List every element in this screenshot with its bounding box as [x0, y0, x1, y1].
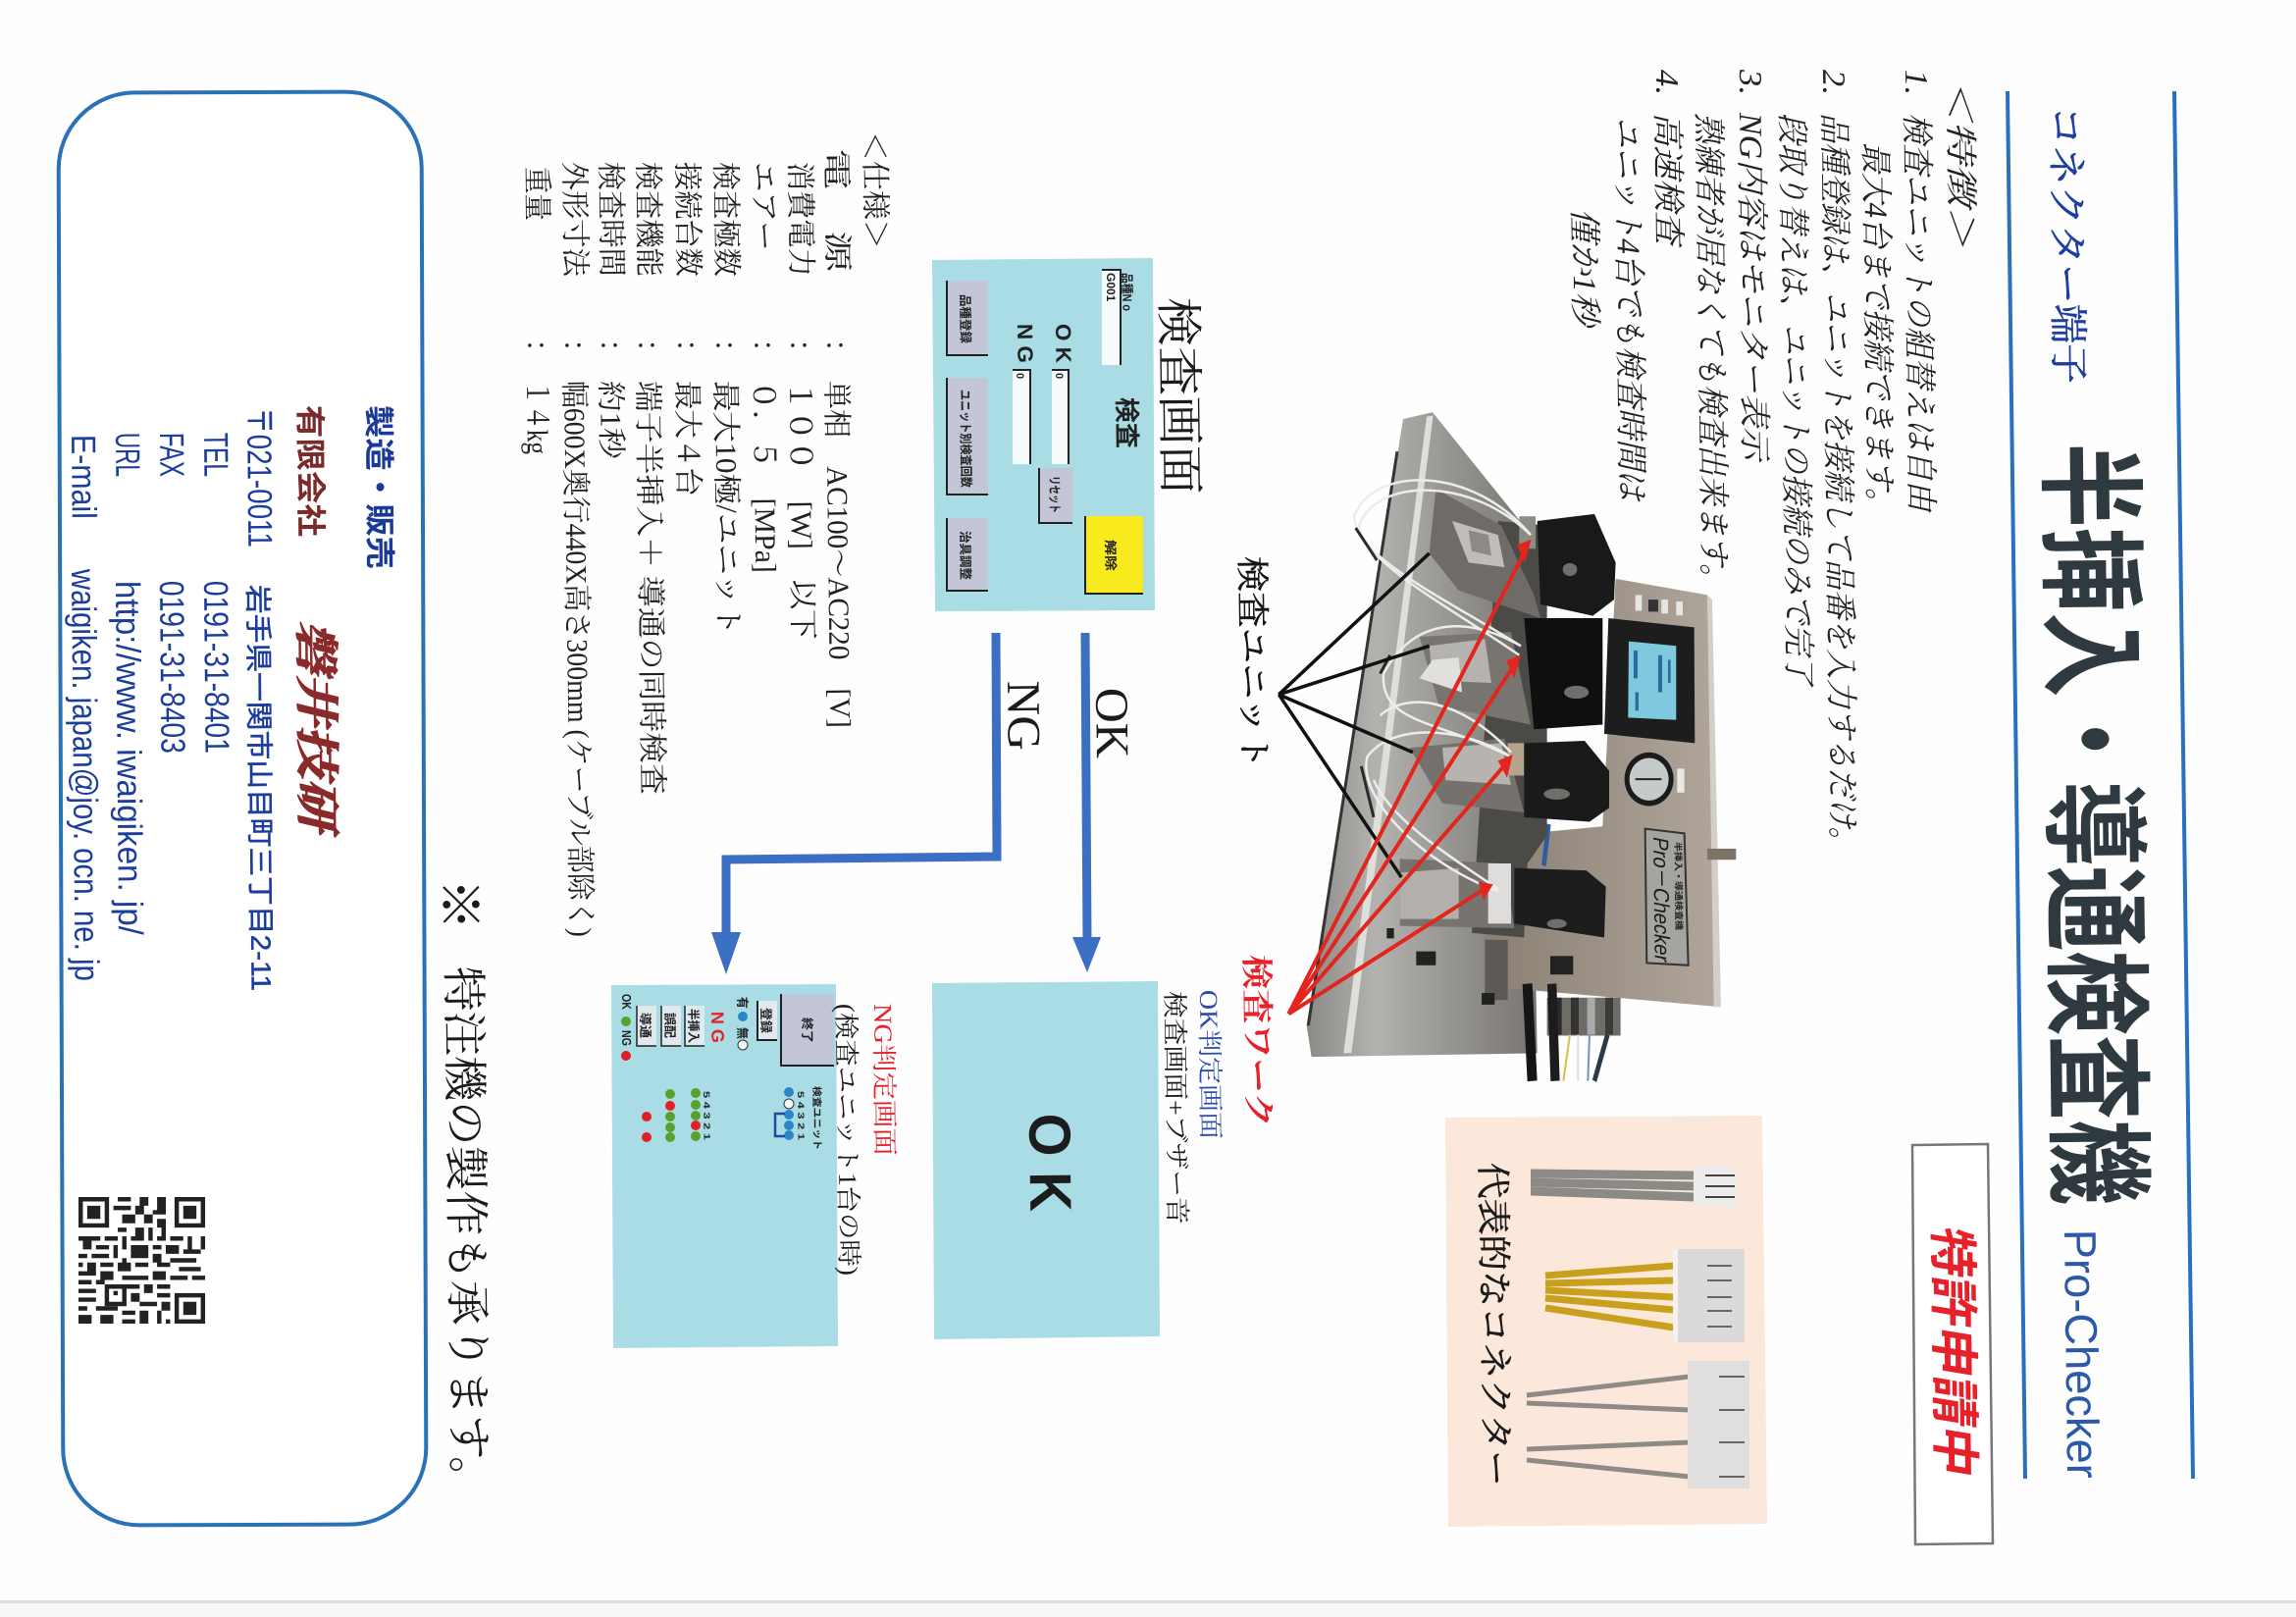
telephone: TEL — [196, 433, 235, 477]
screen title: 検査 — [1112, 397, 1142, 448]
spec: dimensions: 幅600X奥行440X高さ300mm (ケーブル部除く) — [557, 381, 597, 937]
panel: inspection screen — [932, 258, 1155, 611]
OK NG legend — [619, 994, 634, 1061]
OK counter: 0 — [1053, 373, 1065, 379]
email: waigiken. japan@joy. ocn. ne. jp — [64, 568, 106, 981]
label: inspection work: 検査ワーク — [1237, 955, 1276, 1127]
screen bezel — [1604, 618, 1695, 743]
feature 1 — [1856, 70, 1938, 518]
spec: functions: 端子半挿入＋ 導通の同時検査 — [631, 381, 668, 795]
connector: grey four-wire — [1527, 1361, 1749, 1488]
feature 4: 僅か1秒 — [1565, 208, 1602, 331]
connector: grey three-wire — [1531, 1166, 1737, 1207]
half insertion label: 半挿入 — [686, 1009, 701, 1043]
spec: functions: ： — [631, 339, 663, 368]
label: inspection unit: 検査ユニット — [1232, 556, 1273, 769]
features text block — [1565, 69, 1978, 857]
spec: weight — [520, 167, 553, 454]
QR code — [78, 1197, 205, 1324]
spec: connections: 最大４台 — [670, 381, 704, 496]
NG status: N G — [707, 1012, 727, 1043]
manufacturer label: 製造・販売 — [361, 405, 396, 569]
fax: FAX — [152, 433, 190, 477]
product number field — [1102, 270, 1121, 365]
hose — [1543, 824, 1548, 865]
feature 3: 熟練者が居なくても検査出来ます。 — [1690, 113, 1731, 594]
inspection unit map: 検査ユニット — [810, 1086, 824, 1150]
product number label: 品種N o — [1120, 273, 1134, 311]
base plate — [1307, 412, 1538, 1057]
feature 3: 3. — [1732, 69, 1767, 95]
product name: Pro-Checker — [2055, 1228, 2109, 1479]
product register button: 品種登録 — [958, 294, 973, 343]
feature 3: NG内容はモニター表示 — [1732, 112, 1771, 463]
inspection unit map: 5 4 3 2 1 — [796, 1091, 807, 1140]
spec heading: ＜仕様＞ — [858, 131, 891, 249]
presence legend: 有 — [735, 997, 750, 1009]
NG caption: NG判定画面 — [868, 1004, 899, 1156]
spec: dimensions — [557, 162, 597, 937]
url: http://www. iwaigiken. jp/ — [108, 581, 149, 935]
panel: OK result screen — [932, 981, 1160, 1339]
spec: connections — [670, 162, 704, 496]
wiring label — [661, 1006, 681, 1046]
reset button — [1039, 468, 1072, 523]
pressure gauge — [1625, 753, 1685, 807]
machine photo illustration — [1278, 412, 1736, 1081]
feature 4: 4. — [1648, 70, 1684, 95]
email: E-mail — [64, 435, 103, 519]
release button — [1085, 516, 1143, 594]
spec: air: ： — [747, 339, 779, 368]
panel: company contact — [58, 91, 427, 1526]
feature 2: 2. — [1815, 70, 1851, 95]
product register button — [947, 281, 988, 355]
spec: poles: 最大10極/ユニット — [708, 381, 744, 636]
reset button: リセット — [1047, 476, 1062, 513]
white wires — [1354, 480, 1531, 891]
NG caption — [831, 1004, 899, 1276]
feature 1: 検査ユニットの組替えは自由 — [1898, 113, 1938, 514]
company name: 磐井技研 — [290, 619, 341, 841]
end button: 終了 — [800, 1017, 814, 1043]
per-unit inspection count button: ユニット別検査回数 — [958, 390, 973, 488]
spec: functions: 検査機能 — [631, 162, 664, 277]
telephone — [196, 433, 236, 754]
OK NG legend: OK — [619, 994, 634, 1011]
arrow: NG — [711, 633, 997, 974]
side knob — [1707, 849, 1736, 860]
NG counter — [1013, 324, 1037, 464]
continuity label: 導通 — [638, 1013, 652, 1038]
black fixture blocks — [1538, 514, 1616, 616]
spec: power consumption — [783, 162, 818, 640]
name plate text — [1648, 835, 1685, 965]
black leader lines — [1278, 553, 1430, 877]
spec: dimensions: 外形寸法 — [557, 162, 591, 278]
inspection units — [1430, 489, 1540, 618]
NG counter: 0 — [1014, 373, 1025, 379]
spec: time: ： — [594, 339, 626, 368]
OK NG legend: NG — [619, 1030, 634, 1046]
heading: inspection screen: 検査画面 — [1151, 296, 1205, 495]
url: URL — [108, 433, 146, 477]
release button: 解除 — [1103, 540, 1118, 571]
dark wire sleeves — [1356, 528, 1390, 817]
url — [108, 433, 149, 935]
fax: 0191-31-8403 — [152, 581, 192, 754]
OK counter: O K — [1051, 324, 1075, 363]
arrow label: OK: OK — [1085, 687, 1138, 758]
patent pending box — [1912, 1144, 1993, 1544]
feature 4: ユニット4台でも検査時間は — [1608, 117, 1648, 502]
connector caption: 代表的なコネクター — [1473, 1163, 1515, 1487]
spec: time — [594, 162, 627, 460]
spec: power supply — [819, 149, 856, 728]
per-unit inspection count button — [947, 378, 988, 495]
title band: blue rules — [2008, 91, 2193, 1479]
red arrows — [1288, 540, 1532, 1014]
feature 3 — [1690, 69, 1771, 594]
panel: representative connectors — [1445, 1116, 1767, 1527]
switch — [1636, 595, 1683, 615]
OK caption: OK判定画面 — [1194, 990, 1225, 1139]
register button — [757, 1001, 777, 1040]
specifications block — [520, 131, 891, 937]
bottom connector block — [1547, 998, 1621, 1035]
spec: power consumption: １００ [W] 以下 — [783, 381, 818, 640]
custom-order note: ※ — [430, 878, 487, 930]
company type: 有限会社 — [292, 405, 328, 537]
spec: poles — [708, 162, 744, 636]
title: 半挿入・導通検査機 — [2027, 443, 2157, 1205]
OK caption — [1160, 990, 1225, 1225]
continuity label — [637, 1006, 656, 1046]
OK big text: O K — [1017, 1113, 1083, 1212]
jig adjust button: 治具調整 — [958, 531, 973, 580]
email — [64, 435, 106, 981]
feature 1: 1. — [1898, 70, 1933, 95]
cables — [1528, 984, 1607, 1081]
jig adjust button — [947, 518, 988, 591]
product number field: G001 — [1104, 273, 1118, 302]
inspection unit map — [775, 1086, 824, 1150]
panel: NG result screen — [611, 984, 838, 1348]
feature 2: 段取り替えは、ユニットの接続のみで完了 — [1773, 113, 1815, 689]
spec: time: 約1秒 — [594, 381, 627, 460]
features heading: ＜特徴＞ — [1941, 78, 1978, 248]
address: 〒021-0011 — [239, 407, 279, 548]
status indicator grid: 5 4 3 2 1 — [702, 1091, 712, 1140]
spec: power consumption: ： — [783, 339, 815, 368]
OK counter — [1051, 324, 1075, 464]
spec: poles: 検査極数 — [708, 162, 742, 277]
NG caption: (検査ユニット1台の時) — [831, 1004, 862, 1276]
custom-order note: 特注機の製作も承ります。 — [438, 965, 495, 1501]
dark frame behind fixtures — [1472, 521, 1547, 937]
feature 2: 品種登録は、ユニットを接続して品番を入力するだけ。 — [1815, 113, 1859, 857]
connector: yellow five-wire — [1545, 1249, 1745, 1342]
spec: air — [747, 162, 781, 573]
spec: weight: １４kg — [520, 381, 553, 454]
name plate text: Pro－Checker — [1648, 835, 1674, 965]
fax — [152, 433, 192, 754]
feature 1: 最大4台まで接続できます。 — [1856, 142, 1897, 518]
spec: dimensions: ： — [557, 339, 590, 368]
subtitle: connector terminal: コネクター端子 — [2043, 106, 2090, 384]
arrow label: NG: NG — [997, 680, 1050, 751]
NG counter: N G — [1013, 324, 1037, 363]
feature 2 — [1773, 70, 1859, 857]
spec: power supply: ： — [819, 339, 852, 368]
spec: connections: 接続台数 — [670, 162, 704, 277]
spec: air: エアー — [747, 162, 780, 251]
wiring label: 誤配 — [662, 1013, 677, 1038]
control box — [1485, 579, 1720, 1007]
feature 4 — [1565, 70, 1686, 502]
arrow: OK — [1072, 633, 1101, 972]
address: 岩手県一関市山目町三丁目2-11 — [242, 585, 277, 991]
spec: power supply: 単相 AC100～AC220 [V] — [819, 381, 856, 728]
spec: poles: ： — [708, 339, 741, 368]
feature 4: 高速検査 — [1648, 113, 1686, 248]
telephone: 0191-31-8401 — [196, 581, 236, 754]
address — [239, 407, 279, 991]
spec: power supply: 電 源 — [819, 149, 854, 273]
spec: functions — [631, 162, 668, 795]
OK caption: 検査画面+ブザー音 — [1160, 991, 1191, 1225]
spec: air: ０．５ [MPa] — [747, 381, 781, 573]
register button: 登録 — [758, 1008, 773, 1033]
end button — [781, 994, 834, 1066]
LCD screen — [1628, 642, 1676, 720]
spec: connections: ： — [670, 339, 703, 368]
spec: power consumption: 消費電力 — [783, 162, 816, 277]
status indicator grid — [642, 1088, 712, 1142]
presence legend: 無 — [735, 1027, 750, 1039]
presence legend — [735, 997, 750, 1050]
name plate — [1645, 829, 1689, 965]
name plate text: 半挿入・導通検査機 — [1673, 842, 1685, 930]
spec: time: 検査時間 — [594, 162, 627, 277]
patent pending text: 特許申請中 — [1924, 1223, 1983, 1481]
spec: weight: 重量 — [520, 167, 553, 221]
spec: weight: ： — [520, 339, 552, 368]
